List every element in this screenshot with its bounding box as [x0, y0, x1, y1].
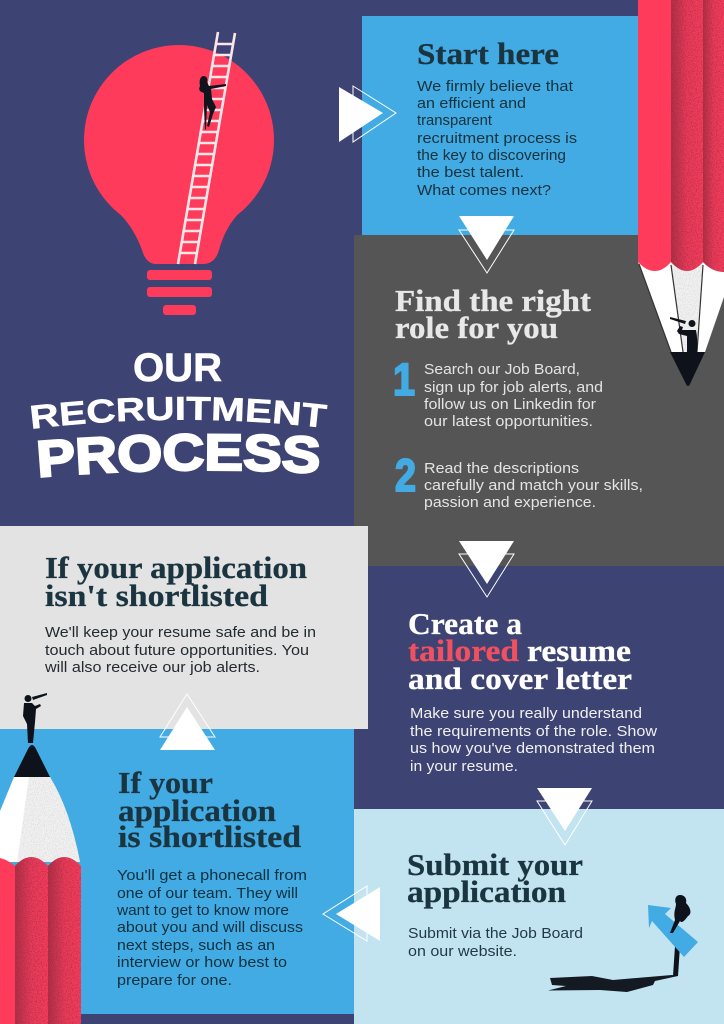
text: is shortlisted: next steps, such as an	[117, 937, 275, 954]
number 2: 2	[395, 450, 416, 501]
text: is shortlisted: one of our team. They will	[117, 885, 298, 902]
panel: submit your application	[354, 809, 724, 1024]
icon: light bulb with ladder	[84, 32, 274, 315]
text: introduction: transparent	[417, 112, 493, 129]
text: tailored resume: the requirements of the role. Show	[410, 723, 657, 740]
icon: bottom left pencil	[0, 693, 81, 1024]
arrow: start to next	[339, 86, 396, 142]
text: step 1: sign up for job alerts, and	[424, 379, 603, 396]
text: step 2: passion and experience.	[424, 494, 596, 511]
text: is shortlisted	[116, 867, 307, 989]
text: step 1: our latest opportunities.	[424, 413, 593, 430]
text: step 1: Search our Job Board,	[424, 361, 580, 378]
heading: find the right role: role for you	[395, 310, 558, 345]
text: isn't shortlisted	[44, 624, 316, 676]
icon: top right pencil	[638, 0, 724, 386]
panel: start here	[362, 16, 638, 235]
title: our recruitment process	[30, 346, 328, 478]
arrow: shortlisted to not shortlisted	[160, 694, 215, 750]
man with telescope silhouette	[23, 693, 47, 743]
text: introduction: We firmly believe that	[417, 78, 574, 95]
text: introduction: What comes next?	[417, 182, 551, 199]
text: is shortlisted: prepare for one.	[117, 972, 232, 989]
man with telescope silhouette	[670, 317, 697, 352]
arrow: resume to submit	[537, 788, 592, 845]
panel: tailored resume	[368, 566, 724, 809]
heading: create a tailored resume	[408, 606, 632, 696]
text: step 1	[424, 361, 603, 430]
text: introduction: the key to discovering	[417, 147, 566, 164]
panel: if your application is shortlisted	[0, 729, 354, 1014]
number 1: 1	[393, 354, 415, 405]
text: step 2: Read the descriptions	[424, 460, 579, 477]
panel: if your application isn't shortlisted	[0, 526, 368, 729]
text: submit: Submit via the Job Board	[408, 925, 583, 942]
heading: create a tailored resume: tailored	[408, 633, 519, 668]
heading: find the right role: Find the right	[395, 283, 592, 318]
heading: start here: Start here	[417, 36, 559, 71]
title: our recruitment process: RECRUITMENT	[30, 396, 328, 429]
heading: is shortlisted: application	[118, 793, 276, 828]
text: introduction	[417, 78, 577, 199]
text: step 2: carefully and match your skills,	[424, 477, 643, 494]
heading: submit your application: application	[407, 874, 566, 909]
text: isn't shortlisted: We'll keep your resume safe and be in	[45, 624, 316, 641]
text: introduction: recruitment process is	[417, 130, 577, 147]
heading: create a tailored resume: resume	[527, 633, 631, 668]
text: step 2	[424, 460, 643, 511]
text: tailored resume: in your resume.	[410, 758, 518, 775]
text: tailored resume	[410, 705, 657, 775]
climbing woman silhouette	[199, 76, 226, 130]
text: is shortlisted: want to get to know more	[116, 902, 289, 919]
heading: is shortlisted: is shortlisted	[118, 819, 301, 854]
heading: is shortlisted: If your	[118, 765, 213, 800]
arrow: start to find role	[459, 216, 514, 273]
heading: isn't shortlisted	[45, 550, 307, 613]
heading: isn't shortlisted: isn't shortlisted	[45, 578, 268, 613]
title: our recruitment process: PROCESS	[38, 433, 320, 478]
text: isn't shortlisted: touch about future opportunities. You	[45, 642, 309, 659]
heading: create a tailored resume: and cover letter	[408, 661, 632, 696]
text: is shortlisted: You'll get a phonecall from	[117, 867, 307, 884]
panel: find the right role	[354, 235, 724, 566]
arrow: find role to resume	[459, 541, 514, 597]
text: isn't shortlisted: will also receive our job alerts.	[44, 659, 260, 676]
heading: find the right role	[395, 283, 592, 345]
text: introduction: an efficient and	[417, 95, 526, 112]
heading: submit your application: Submit your	[407, 847, 583, 882]
heading: isn't shortlisted: If your application	[45, 550, 307, 585]
heading: is shortlisted	[118, 765, 301, 854]
heading: submit your application	[407, 847, 583, 909]
text: step 1: follow us on Linkedin for	[424, 396, 596, 413]
arrow: submit to shortlisted	[323, 886, 380, 941]
title: our recruitment process: OUR	[133, 346, 222, 390]
text: tailored resume: us how you've demonstrated them	[410, 740, 655, 757]
icon: person with arrow and shadow	[548, 895, 698, 992]
heading: create a tailored resume: Create a	[408, 606, 522, 641]
text: submit	[408, 925, 583, 960]
text: is shortlisted: about you and will discuss	[117, 919, 303, 936]
bulb base bars	[147, 270, 212, 315]
text: is shortlisted: interview or how best to	[117, 954, 287, 971]
text: tailored resume: Make sure you really understand	[410, 705, 642, 722]
ladder	[178, 32, 235, 264]
text: submit: on our website.	[408, 943, 517, 960]
text: introduction: the best talent.	[417, 164, 524, 181]
